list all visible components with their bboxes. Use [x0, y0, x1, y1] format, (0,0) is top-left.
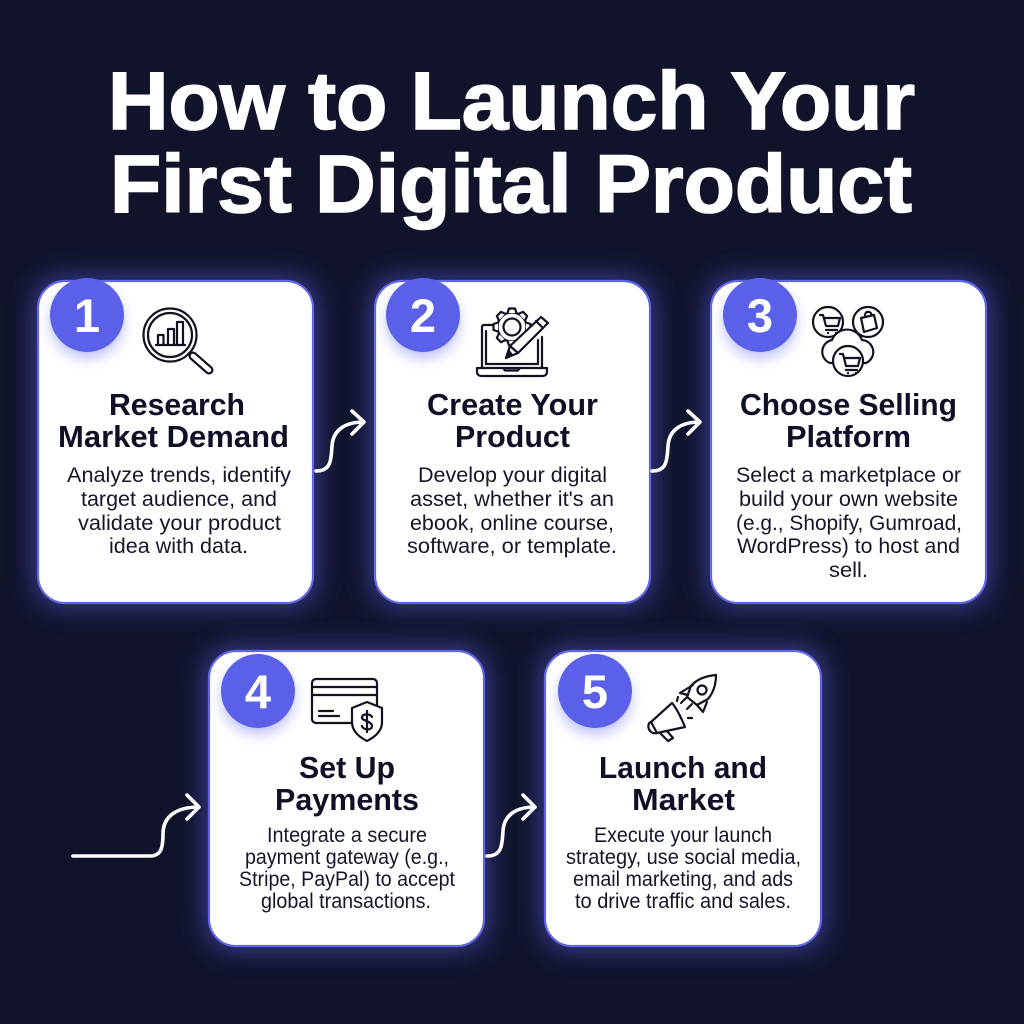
- icon: credit card with shield: [312, 679, 382, 741]
- heading: research market demand: Market Demand: [58, 419, 289, 454]
- heading: choose selling platform: [740, 387, 957, 454]
- heading: choose selling platform: Platform: [786, 419, 911, 454]
- body text: step 4: Integrate a secure: [267, 823, 427, 847]
- card 1 background: [38, 281, 313, 603]
- panel: step 5 launch and market: [540, 646, 826, 951]
- heading: choose selling platform: Choose Selling: [740, 387, 957, 422]
- panel: step 2 create your product: [370, 276, 655, 608]
- body text: step 3: Select a marketplace or: [736, 463, 961, 487]
- body text: step 1: validate your product: [78, 511, 281, 535]
- icon: magnifier over bar chart: [144, 308, 209, 370]
- number badge 4: 4: [245, 665, 271, 718]
- card 2 background: [375, 281, 650, 603]
- arrow: entry to step 4: [73, 795, 199, 856]
- body text: step 1: [67, 463, 291, 558]
- heading: create your product: Product: [455, 419, 570, 454]
- number badge 3: [723, 278, 797, 352]
- heading: launch and market: Market: [632, 782, 735, 817]
- number badge 4: [221, 654, 295, 728]
- body text: step 1: idea with data.: [109, 534, 248, 558]
- body text: step 3: (e.g., Shopify, Gumroad,: [736, 511, 962, 535]
- body text: step 4: global transactions.: [261, 889, 431, 913]
- body text: step 2: software, or template.: [407, 534, 617, 558]
- heading: research market demand: Research: [109, 387, 245, 422]
- heading: set up payments: Set Up: [299, 750, 395, 785]
- body text: step 5: to drive traffic and sales.: [575, 889, 791, 913]
- body text: step 4: Stripe, PayPal) to accept: [239, 867, 455, 891]
- card 3 background: [711, 281, 986, 603]
- body text: step 1: Analyze trends, identify: [67, 463, 291, 487]
- number badge 1: 1: [74, 289, 100, 342]
- heading: set up payments: [275, 750, 419, 817]
- number badge 5: [558, 654, 632, 728]
- body text: step 3: WordPress) to host and: [737, 534, 960, 558]
- heading: launch and market: [599, 750, 767, 817]
- body text: step 2: [407, 463, 617, 558]
- icon: laptop with gear and pencil: [477, 308, 548, 376]
- heading: create your product: [427, 387, 598, 454]
- body text: step 5: Execute your launch: [594, 823, 772, 847]
- body text: step 5: [566, 823, 801, 913]
- body text: step 5: email marketing, and ads: [573, 867, 793, 891]
- body text: step 3: sell.: [829, 558, 868, 582]
- body text: step 4: [239, 823, 455, 913]
- heading: create your product: Create Your: [427, 387, 598, 422]
- body text: step 2: asset, whether it's an: [410, 487, 614, 511]
- icon: rocket and megaphone: [648, 675, 716, 741]
- icon: cloud with shopping carts and bag: [813, 307, 883, 376]
- number badge 2: 2: [410, 289, 436, 342]
- card 5 background: [545, 651, 821, 946]
- title: First Digital Product: [110, 139, 912, 230]
- card 4 background: [209, 651, 484, 946]
- number badge 2: [386, 278, 460, 352]
- arrow: step 4 to step 5: [487, 795, 535, 856]
- arrow: step 2 to step 3: [652, 411, 700, 471]
- body text: step 5: strategy, use social media,: [566, 845, 801, 869]
- body text: step 4: payment gateway (e.g.,: [245, 845, 449, 869]
- body text: step 3: build your own website: [739, 487, 958, 511]
- panel: step 3 choose selling platform: [706, 276, 991, 608]
- body text: step 3: [736, 463, 962, 582]
- panel: step 1 research market demand: [33, 276, 318, 608]
- heading: research market demand: [58, 387, 289, 454]
- number badge 5: 5: [582, 665, 608, 718]
- number badge 1: [50, 278, 124, 352]
- body text: step 2: Develop your digital: [418, 463, 607, 487]
- title: [108, 56, 915, 230]
- arrow: step 1 to step 2: [316, 411, 364, 471]
- title: How to Launch Your: [108, 56, 915, 147]
- heading: set up payments: Payments: [275, 782, 419, 817]
- body text: step 2: ebook, online course,: [410, 511, 614, 535]
- body text: step 1: target audience, and: [81, 487, 277, 511]
- number badge 3: 3: [747, 289, 773, 342]
- panel: step 4 set up payments: [204, 646, 489, 951]
- heading: launch and market: Launch and: [599, 750, 767, 785]
